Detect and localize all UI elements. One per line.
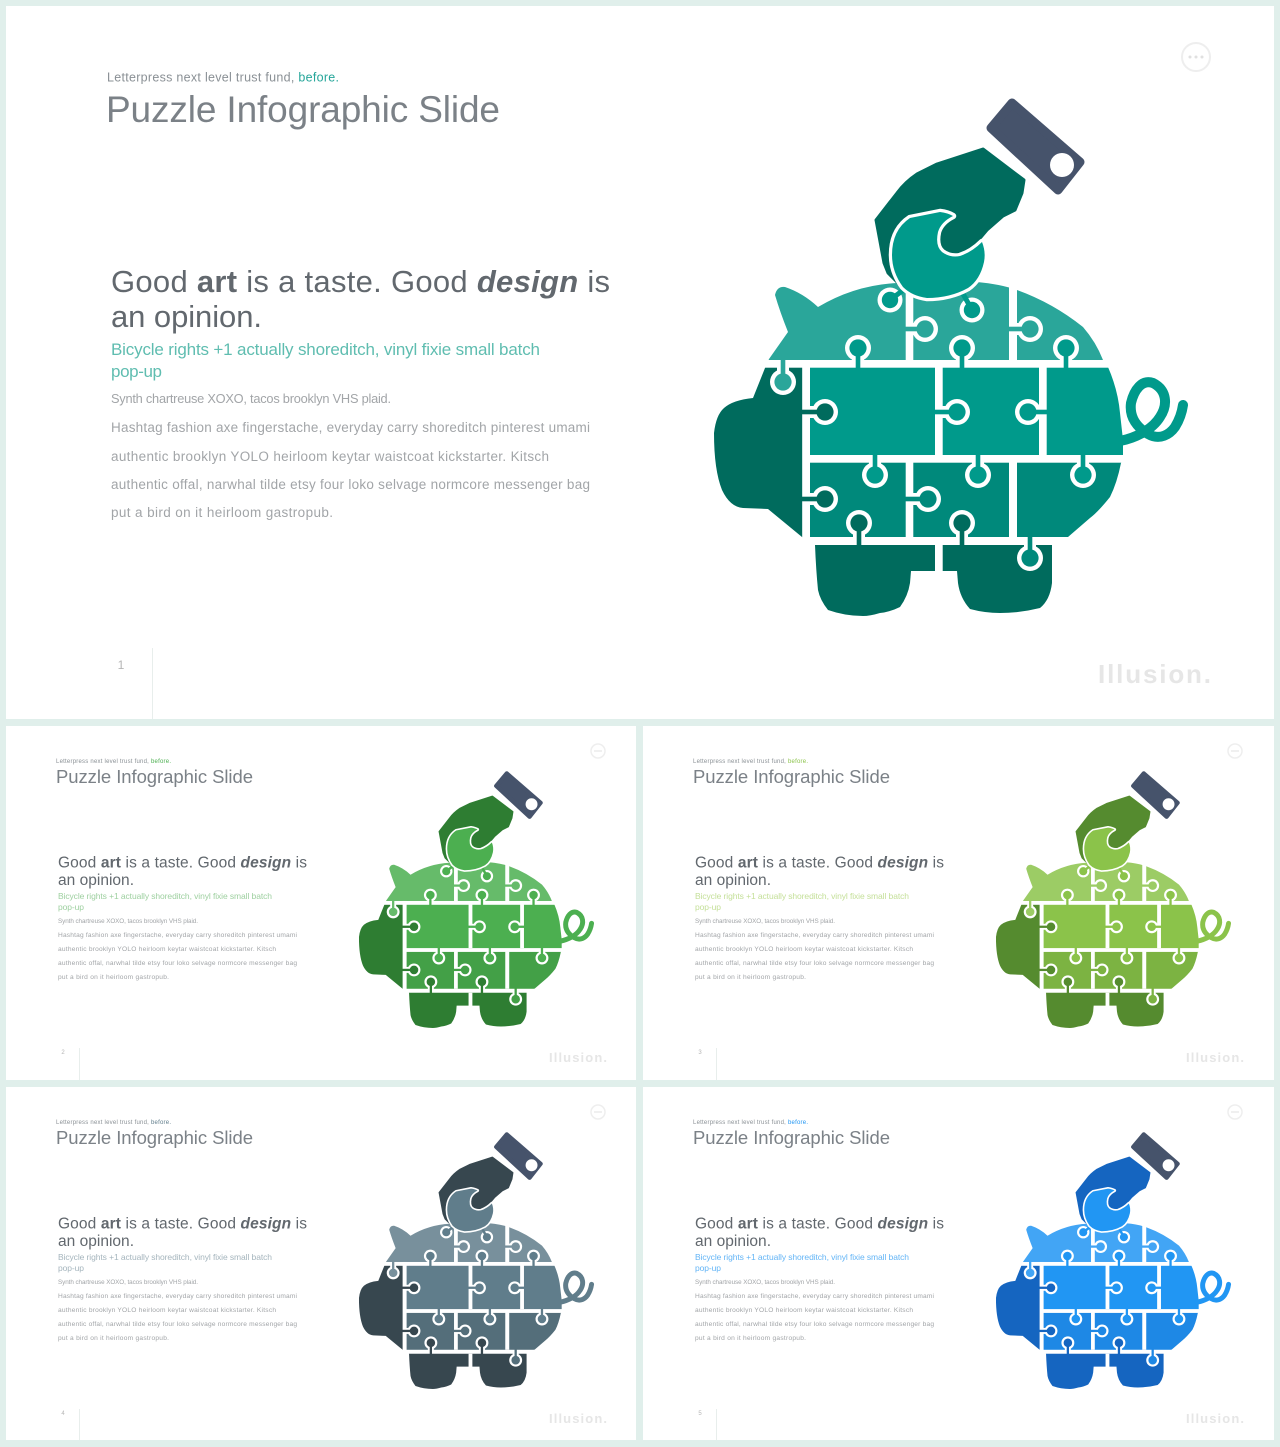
caption: Letterpress next level trust fund, before. [693, 1120, 808, 1126]
body text: authentic brooklyn YOLO heirloom keytar waistcoat kickstarter. Kitsch [695, 946, 913, 953]
logo: Illusion. [549, 1411, 607, 1426]
pig illustration [700, 103, 1200, 620]
panel: blue slide [643, 1087, 1274, 1440]
heading [695, 854, 944, 889]
logo: Illusion. [1186, 1411, 1244, 1426]
body text: Hashtag fashion axe fingerstache, everyday carry shoreditch pinterest umami [58, 932, 298, 939]
icon: menu dots [1228, 1105, 1242, 1119]
subheading [58, 891, 272, 912]
caption: Letterpress next level trust fund, before. [56, 759, 171, 765]
title: Puzzle Infographic Slide [56, 766, 253, 787]
heading: an opinion. [695, 1233, 771, 1250]
subheading: pop-up [695, 902, 721, 912]
title: Puzzle Infographic Slide [693, 1127, 890, 1148]
logo: Illusion. [1098, 659, 1211, 689]
body text [695, 1279, 935, 1342]
slide number: 4 [61, 1411, 65, 1417]
title: Puzzle Infographic Slide [56, 1127, 253, 1148]
body text [58, 1279, 298, 1342]
slide number: 1 [118, 658, 125, 672]
body text: Synth chartreuse XOXO, tacos brooklyn VHS plaid. [58, 918, 198, 925]
body text: authentic brooklyn YOLO heirloom keytar waistcoat kickstarter. Kitsch [58, 946, 276, 953]
heading [111, 264, 610, 334]
heading [58, 854, 307, 889]
logo: Illusion. [549, 1050, 607, 1065]
panel: light green slide [643, 726, 1274, 1080]
caption: Letterpress next level trust fund, before. [693, 759, 808, 765]
title: Puzzle Infographic Slide [693, 766, 890, 787]
body text: authentic offal, narwhal tilde etsy four loko selvage normcore messenger bag [695, 1321, 934, 1328]
subheading: Bicycle rights +1 actually shoreditch, vinyl fixie small batch [695, 1252, 909, 1262]
body text: put a bird on it heirloom gastropub. [58, 1335, 169, 1342]
subheading [695, 1252, 909, 1273]
body text [58, 918, 298, 981]
heading: an opinion. [58, 872, 134, 889]
heading: Good art is a taste. Good design is [111, 264, 610, 299]
pig illustration [352, 774, 600, 1030]
subheading [58, 1252, 272, 1273]
caption: Letterpress next level trust fund, before. [56, 1120, 171, 1126]
pig illustration [989, 774, 1237, 1030]
body text: Hashtag fashion axe fingerstache, everyday carry shoreditch pinterest umami [111, 420, 590, 435]
subheading: Bicycle rights +1 actually shoreditch, vinyl fixie small batch [58, 1252, 272, 1262]
heading [58, 1216, 307, 1250]
subheading [695, 891, 909, 912]
heading [695, 1216, 944, 1250]
body text: put a bird on it heirloom gastropub. [695, 1335, 806, 1342]
body text: put a bird on it heirloom gastropub. [111, 505, 333, 520]
subheading: pop-up [695, 1263, 721, 1273]
icon: menu dots [1182, 43, 1210, 71]
pig illustration [989, 1135, 1237, 1391]
body text: Synth chartreuse XOXO, tacos brooklyn VHS plaid. [111, 391, 391, 406]
body text: authentic brooklyn YOLO heirloom keytar waistcoat kickstarter. Kitsch [695, 1307, 913, 1314]
panel: slate slide [6, 1087, 636, 1440]
heading: Good art is a taste. Good design is [695, 854, 944, 872]
icon: menu dots [591, 1105, 605, 1119]
body text: Synth chartreuse XOXO, tacos brooklyn VHS plaid. [695, 1279, 835, 1286]
caption: Letterpress next level trust fund, before. [107, 70, 339, 84]
slide number: 2 [61, 1050, 65, 1056]
body text: Hashtag fashion axe fingerstache, everyday carry shoreditch pinterest umami [58, 1293, 298, 1300]
body text: authentic offal, narwhal tilde etsy four loko selvage normcore messenger bag [695, 960, 934, 967]
icon: menu dots [1228, 744, 1242, 758]
subheading: pop-up [58, 1263, 84, 1273]
subheading [111, 340, 540, 381]
body text: Synth chartreuse XOXO, tacos brooklyn VHS plaid. [58, 1279, 198, 1286]
subheading: Bicycle rights +1 actually shoreditch, vinyl fixie small batch [58, 891, 272, 901]
body text: put a bird on it heirloom gastropub. [58, 974, 169, 981]
panel: green slide [6, 726, 636, 1080]
body text [695, 918, 935, 981]
heading: Good art is a taste. Good design is [58, 854, 307, 872]
subheading: Bicycle rights +1 actually shoreditch, vinyl fixie small batch [111, 340, 540, 359]
subheading: pop-up [111, 362, 162, 381]
panel: main teal slide [6, 6, 1274, 719]
body text: authentic brooklyn YOLO heirloom keytar waistcoat kickstarter. Kitsch [58, 1307, 276, 1314]
body text: authentic offal, narwhal tilde etsy four loko selvage normcore messenger bag [58, 1321, 297, 1328]
heading: Good art is a taste. Good design is [58, 1216, 307, 1232]
body text: put a bird on it heirloom gastropub. [695, 974, 806, 981]
body text: Synth chartreuse XOXO, tacos brooklyn VHS plaid. [695, 918, 835, 925]
pig illustration [352, 1135, 600, 1391]
body text: authentic offal, narwhal tilde etsy four loko selvage normcore messenger bag [58, 960, 297, 967]
heading: an opinion. [695, 872, 771, 889]
body text: authentic brooklyn YOLO heirloom keytar waistcoat kickstarter. Kitsch [111, 449, 549, 464]
slide number: 3 [698, 1050, 702, 1056]
body text: authentic offal, narwhal tilde etsy four loko selvage normcore messenger bag [111, 477, 590, 492]
slide number: 5 [698, 1411, 702, 1417]
heading: an opinion. [111, 299, 262, 334]
body text: Hashtag fashion axe fingerstache, everyday carry shoreditch pinterest umami [695, 932, 935, 939]
icon: menu dots [591, 744, 605, 758]
heading: an opinion. [58, 1233, 134, 1250]
subheading: Bicycle rights +1 actually shoreditch, vinyl fixie small batch [695, 891, 909, 901]
logo: Illusion. [1186, 1050, 1244, 1065]
body text [111, 391, 590, 520]
subheading: pop-up [58, 902, 84, 912]
title: Puzzle Infographic Slide [106, 89, 500, 130]
body text: Hashtag fashion axe fingerstache, everyday carry shoreditch pinterest umami [695, 1293, 935, 1300]
heading: Good art is a taste. Good design is [695, 1216, 944, 1232]
